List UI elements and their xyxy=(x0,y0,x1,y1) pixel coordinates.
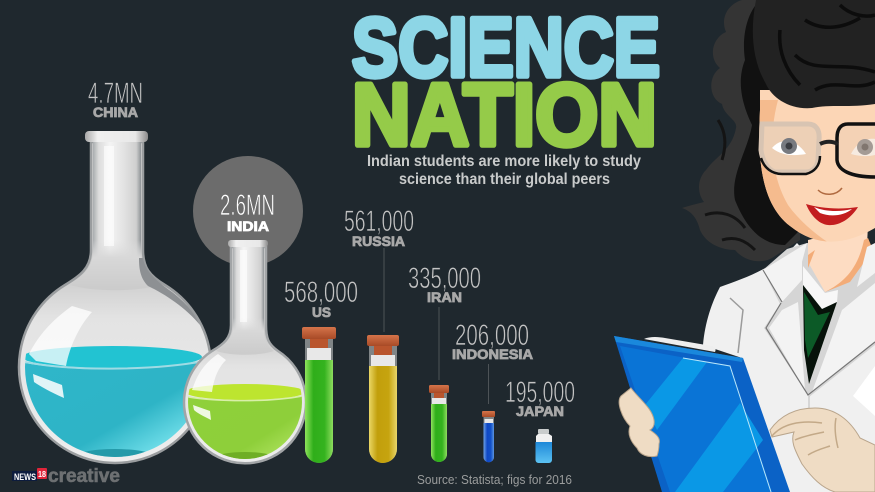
Japan vial xyxy=(536,429,552,463)
US label xyxy=(284,276,358,320)
Iran label: 335,000 xyxy=(408,262,481,295)
India label: 2.6MN xyxy=(220,189,275,222)
scientist illustration xyxy=(614,0,875,492)
face shading xyxy=(759,100,826,242)
China label: 4.7MN xyxy=(88,77,143,110)
left eye xyxy=(772,138,806,155)
inner collar flap xyxy=(803,266,838,310)
clipboard pages xyxy=(644,337,716,352)
subtitle: Indian students are more likely to study xyxy=(367,153,641,170)
Russia label: 561,000 xyxy=(344,205,414,238)
Russia label xyxy=(344,205,414,249)
subtitle: science than their global peers xyxy=(399,171,610,188)
fingers detail xyxy=(772,418,838,455)
News18 Creative logo: creative xyxy=(48,466,120,487)
News18 Creative logo: 18 xyxy=(38,470,46,479)
nose xyxy=(818,188,842,194)
lab coat xyxy=(703,243,875,492)
India label xyxy=(220,189,275,234)
coat centre seam xyxy=(808,396,810,408)
left hand xyxy=(619,388,659,457)
coat highlight xyxy=(853,366,875,416)
title line: NATION: NATION xyxy=(352,65,657,164)
glasses lens tint: left xyxy=(761,124,819,172)
cyan liquid xyxy=(25,346,202,457)
Russia test tube xyxy=(367,335,399,463)
News18 Creative logo xyxy=(12,466,120,487)
blue clipboard xyxy=(614,336,790,492)
lips xyxy=(806,204,858,225)
green shirt xyxy=(803,285,837,384)
India label: INDIA xyxy=(227,218,269,234)
India flask xyxy=(184,240,306,470)
fringe xyxy=(753,0,875,108)
right hand xyxy=(770,408,875,492)
India highlight circle xyxy=(193,156,303,266)
Japan label: JAPAN xyxy=(516,403,564,419)
Iran connector xyxy=(438,307,440,380)
Russia label: RUSSIA xyxy=(352,233,405,249)
Indonesia connector xyxy=(488,364,490,404)
News18 Creative logo: NEWS xyxy=(14,472,36,482)
left lapel xyxy=(769,302,806,392)
Japan label: 195,000 xyxy=(505,376,575,409)
China flask xyxy=(19,131,211,470)
source note: Source: Statista; figs for 2016 xyxy=(417,473,572,487)
right lapel xyxy=(812,283,875,392)
coat shading: lapel underlay xyxy=(763,243,875,397)
US label: 568,000 xyxy=(284,276,358,309)
Iran label: IRAN xyxy=(427,289,462,305)
Indonesia test tube xyxy=(482,411,495,462)
right eye xyxy=(851,139,875,156)
upper collar: left xyxy=(763,243,807,302)
US test tube xyxy=(302,327,336,463)
US label: US xyxy=(312,304,331,320)
Russia connector xyxy=(383,248,385,332)
flask lip xyxy=(85,131,148,142)
face xyxy=(759,90,875,242)
Iran test tube xyxy=(429,385,449,462)
Japan label xyxy=(505,376,575,419)
flask lip xyxy=(228,240,268,247)
China label xyxy=(88,77,143,120)
Indonesia label: INDONESIA xyxy=(452,346,533,362)
right collar xyxy=(857,243,875,287)
subtitle xyxy=(367,153,641,188)
hair xyxy=(682,0,800,261)
glasses xyxy=(761,124,875,177)
title line: SCIENCE: SCIENCE xyxy=(352,0,660,94)
Indonesia label xyxy=(452,319,533,362)
sleeve fold xyxy=(730,298,743,353)
Iran label xyxy=(408,262,481,305)
title xyxy=(352,0,660,164)
green liquid xyxy=(188,384,302,459)
China label: CHINA xyxy=(93,104,138,120)
lapel edges xyxy=(763,270,875,395)
Indonesia label: 206,000 xyxy=(455,319,529,352)
neck xyxy=(808,225,868,292)
